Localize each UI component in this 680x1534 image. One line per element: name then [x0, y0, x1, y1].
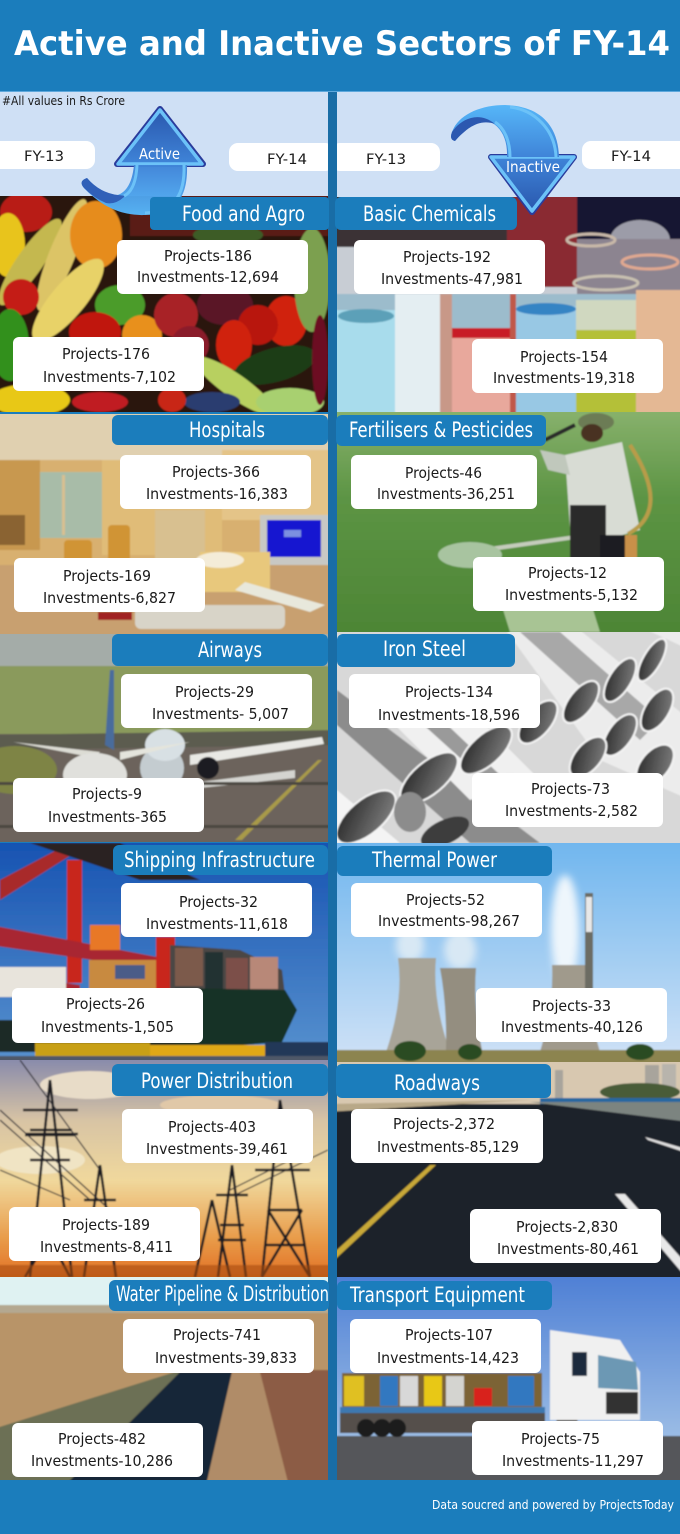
FY-13 box — [350, 1319, 541, 1373]
icon: active arrow — [82, 109, 203, 215]
label: FY-13 left: FY-13 — [24, 149, 64, 165]
photo: vegetables — [0, 196, 328, 412]
header: iron steel — [337, 634, 515, 667]
FY-14 box: Investments-11,297 — [502, 1452, 644, 1470]
header: roadways — [336, 1064, 551, 1098]
FY-13 box — [12, 988, 203, 1043]
panel: transport equipment — [337, 1277, 680, 1480]
FY-13 box — [351, 883, 542, 937]
header: hospitals — [112, 415, 328, 445]
FY-13 box: Projects-482 — [58, 1430, 146, 1448]
FY-14 box: Projects-33 — [532, 997, 611, 1015]
FY-14 box: Investments-2,582 — [505, 802, 638, 820]
FY-14 box — [123, 1319, 314, 1373]
photo: pylons at sunset — [0, 1060, 328, 1277]
FY-14 box — [122, 1109, 313, 1163]
header: thermal power: Thermal Power — [371, 848, 497, 872]
FY-14 box: Projects-75 — [521, 1430, 600, 1448]
FY-13 box — [354, 240, 545, 294]
FY-13 box: Investments-98,267 — [378, 912, 520, 930]
FY-13 box: Investments-36,251 — [377, 485, 515, 503]
header: iron steel: Iron Steel — [383, 637, 466, 661]
FY-13 box: Investments-10,286 — [31, 1452, 173, 1470]
FY-13 box — [14, 558, 205, 612]
header: food and agro: Food and Agro — [182, 202, 305, 226]
FY-13 box: Investments-6,827 — [43, 589, 176, 607]
FY-13 box: Investments-7,102 — [43, 368, 176, 386]
label: FY-14 left: FY-14 — [267, 152, 307, 168]
label: FY-13 right — [331, 143, 440, 171]
FY-14 box — [121, 674, 312, 728]
FY-13 box: Projects-26 — [66, 995, 145, 1013]
FY-14 box: Investments-12,694 — [137, 268, 279, 286]
photo: hospital room — [0, 414, 328, 634]
panel: thermal power — [337, 843, 680, 1062]
footer band — [0, 1480, 680, 1534]
panel: basic chemicals — [335, 197, 680, 412]
FY-13 box: Investments-47,981 — [381, 270, 523, 288]
header: fertilisers and pesticides: Fertilisers & Pesticides — [349, 418, 533, 442]
FY-13 box — [13, 778, 204, 832]
title banner — [0, 0, 680, 92]
FY-14 box: Investments-11,618 — [146, 915, 288, 933]
FY-14 box: Projects-29 — [175, 683, 254, 701]
FY-13 box: Projects-169 — [63, 567, 151, 585]
note: units: #All values in Rs Crore — [2, 93, 125, 108]
arrow label: Inactive — [506, 158, 560, 176]
FY-13 box: Projects-107 — [405, 1326, 493, 1344]
FY-14 box — [472, 339, 663, 393]
FY-13 box: Investments-14,423 — [377, 1349, 519, 1367]
FY-13 box: Investments-365 — [48, 808, 167, 826]
header: fertilisers and pesticides — [336, 415, 546, 446]
FY-13 box — [351, 455, 537, 509]
FY-14 box: Investments-39,461 — [146, 1140, 288, 1158]
header: power distribution: Power Distribution — [141, 1069, 293, 1093]
photo: container ship — [0, 843, 328, 1060]
FY-13 box — [9, 1207, 200, 1261]
label: FY-14 right: FY-14 — [611, 149, 651, 165]
FY-14 box: Projects-32 — [179, 893, 258, 911]
FY-13 box: Projects-192 — [403, 248, 491, 266]
header: airways — [112, 634, 328, 666]
FY-14 box: Projects-154 — [520, 348, 608, 366]
FY-13 box: Projects-2,372 — [393, 1115, 495, 1133]
panel: iron steel — [337, 632, 680, 843]
FY-13 box: Investments-1,505 — [41, 1018, 174, 1036]
label: FY-14 left — [229, 143, 334, 171]
icon: inactive arrow — [451, 105, 574, 212]
photo: steel pipes — [337, 632, 680, 843]
FY-14 box — [476, 988, 667, 1042]
panel: shipping infrastructure — [0, 843, 328, 1060]
column divider — [328, 92, 337, 1480]
FY-14 box: Investments-40,126 — [501, 1018, 643, 1036]
FY-13 box: Projects-46 — [405, 464, 482, 482]
panel: water pipeline and distribution — [0, 1277, 329, 1480]
FY-13 box: Projects-52 — [406, 891, 485, 909]
photo: highway — [337, 1062, 680, 1277]
header: thermal power — [337, 846, 552, 876]
photo: truck — [337, 1277, 680, 1480]
header: basic chemicals: Basic Chemicals — [363, 202, 496, 226]
FY-13 box — [351, 1109, 543, 1163]
FY-14 box: Projects-403 — [168, 1118, 256, 1136]
FY-13 box: Projects-189 — [62, 1216, 150, 1234]
header: shipping infrastructure — [113, 845, 328, 875]
FY-14 box: Projects-12 — [528, 564, 607, 582]
header: water pipeline and distribution: Water Pipeline & Distribution — [116, 1282, 329, 1306]
panel: power distribution — [0, 1060, 328, 1277]
FY-14 box: Investments-39,833 — [155, 1349, 297, 1367]
panel: fertilisers and pesticides — [336, 412, 680, 632]
FY-13 box: Projects-176 — [62, 345, 150, 363]
header: power distribution — [112, 1064, 328, 1096]
FY-13 box — [349, 674, 540, 728]
FY-14 box — [120, 455, 311, 509]
FY-14 box — [472, 773, 663, 827]
FY-14 box: Projects-186 — [164, 247, 252, 265]
header: shipping infrastructure: Shipping Infrastructure — [124, 848, 315, 872]
FY-14 box: Projects-366 — [172, 463, 260, 481]
FY-13 box: Investments-8,411 — [40, 1238, 173, 1256]
FY-14 box: Projects-741 — [173, 1326, 261, 1344]
FY-14 box — [117, 240, 308, 294]
photo: cooling towers — [337, 843, 680, 1062]
label: FY-13 right: FY-13 — [366, 152, 406, 168]
header: airways: Airways — [198, 638, 262, 662]
FY-14 box: Investments-80,461 — [497, 1240, 639, 1258]
FY-14 box: Investments-5,132 — [505, 586, 638, 604]
header: food and agro — [150, 197, 329, 230]
label: FY-14 right — [582, 141, 680, 169]
FY-13 box: Projects-134 — [405, 683, 493, 701]
FY-14 box — [473, 557, 664, 611]
FY-13 box: Investments-85,129 — [377, 1138, 519, 1156]
FY-14 box: Investments- 5,007 — [152, 705, 289, 723]
panel: airways — [0, 634, 328, 842]
panel: food and agro — [0, 196, 328, 412]
arrow label: Active — [139, 145, 180, 163]
photo: desert pipeline — [0, 1277, 328, 1480]
FY-14 box — [121, 883, 312, 937]
FY-13 box: Projects-9 — [72, 785, 142, 803]
panel: hospitals — [0, 414, 328, 634]
FY-14 box — [470, 1209, 661, 1263]
photo: airplane on runway — [0, 634, 328, 842]
header: roadways: Roadways — [394, 1071, 480, 1095]
header: basic chemicals — [335, 197, 517, 230]
FY-14 box: Investments-16,383 — [146, 485, 288, 503]
photo: test tubes — [337, 197, 680, 412]
panel: roadways — [336, 1062, 680, 1277]
FY-13 box — [12, 1423, 203, 1477]
legend band — [0, 92, 680, 197]
FY-14 box: Projects-2,830 — [516, 1218, 618, 1236]
FY-14 box: Projects-73 — [531, 780, 610, 798]
FY-14 box: Investments-19,318 — [493, 369, 635, 387]
FY-13 box — [13, 337, 204, 391]
header: water pipeline and distribution — [109, 1280, 329, 1311]
header: hospitals: Hospitals — [189, 418, 265, 442]
photo: farmer spraying field — [337, 412, 680, 632]
FY-14 box — [472, 1421, 663, 1475]
header: transport equipment: Transport Equipment — [349, 1283, 525, 1307]
label: FY-13 left — [0, 141, 95, 169]
FY-13 box: Investments-18,596 — [378, 706, 520, 724]
